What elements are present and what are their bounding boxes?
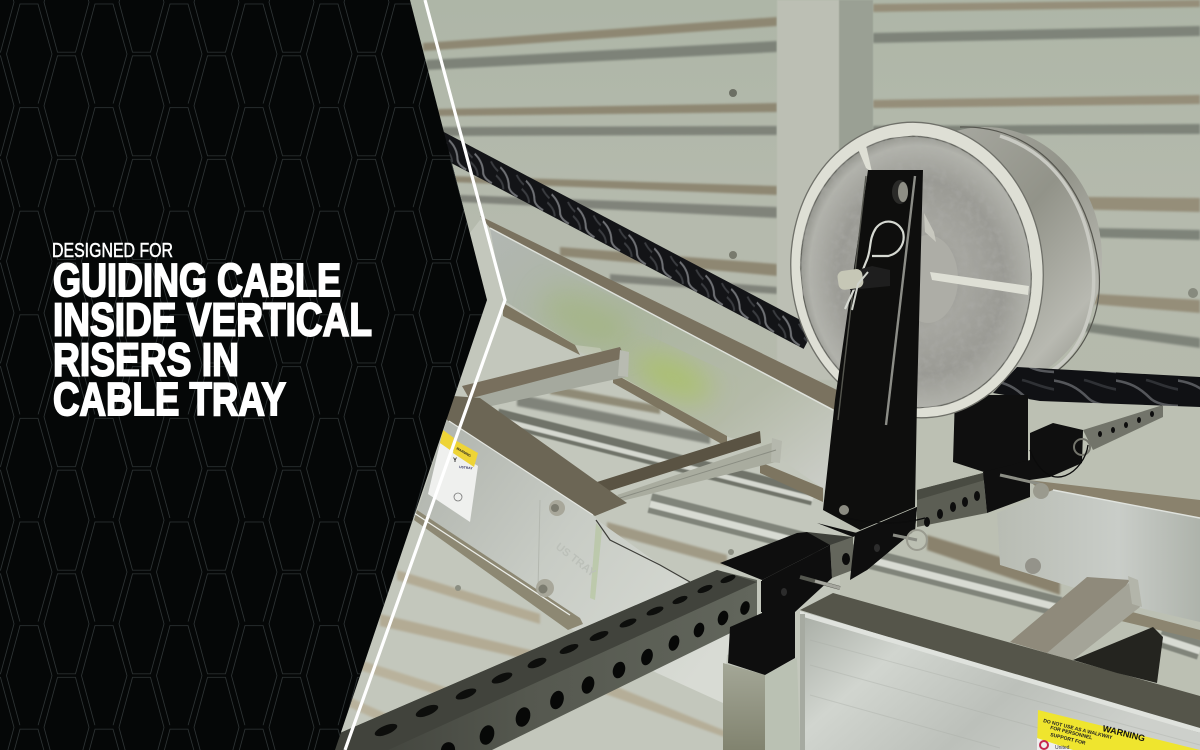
wheel spokes xyxy=(858,145,1029,295)
galvanized post sleeve xyxy=(723,658,800,750)
main title xyxy=(53,254,372,425)
photo: cable roller guide mounted on cable tray xyxy=(300,0,1200,750)
clevis pin and R-clip xyxy=(837,222,904,310)
front tray rail with warning label xyxy=(800,593,1200,750)
rear perforated tube xyxy=(917,405,1163,527)
rear bracket collars and pins xyxy=(983,423,1090,513)
tube side holes xyxy=(439,600,751,750)
back tray rail and rung xyxy=(997,480,1200,683)
rail compliance label: USTRAY xyxy=(459,465,474,470)
ladder rungs xyxy=(462,347,782,501)
rail compliance label xyxy=(428,430,478,522)
main title: INSIDE VERTICAL xyxy=(53,294,372,346)
main title: GUIDING CABLE xyxy=(53,254,341,306)
pulley wheel front flange xyxy=(776,110,1058,430)
warning label: DO NOT USE AS A WALKWAY xyxy=(1043,718,1113,741)
tube top holes xyxy=(373,573,737,739)
rear black riser bracket xyxy=(953,395,1028,473)
perforated square steel tube xyxy=(300,570,757,750)
warning label xyxy=(1037,710,1200,750)
white chevron outline xyxy=(345,0,505,750)
heading block xyxy=(52,239,372,425)
bolts on rail xyxy=(536,500,565,597)
black chevron panel with hexagon pattern xyxy=(0,0,487,750)
main title: CABLE TRAY xyxy=(53,373,286,425)
warning label: WARNING xyxy=(1102,723,1146,743)
twisted cable, right run xyxy=(993,367,1200,407)
rail compliance label: Y xyxy=(453,458,457,464)
tray stamp: US TRAY xyxy=(553,541,598,580)
wheel dish xyxy=(787,125,1045,419)
lower wall panels xyxy=(340,220,1200,750)
black upright bracket arm xyxy=(823,170,923,530)
lower-left tray rail with label xyxy=(414,395,760,703)
wheel hub xyxy=(898,235,958,323)
upper wall with stripes xyxy=(400,0,1200,450)
upper tray side rail xyxy=(480,216,837,502)
kicker: designed for: DESIGNED FOR xyxy=(52,239,173,262)
twisted cable, left run xyxy=(414,122,815,349)
warning label: SUPPORT FOR xyxy=(1050,732,1086,747)
main title: RISERS IN xyxy=(53,334,239,386)
spool wheel back flange xyxy=(868,127,1102,389)
wall pillar xyxy=(777,0,873,380)
conduit pipes behind tray xyxy=(497,417,1200,651)
warning label: FOR PERSONNEL xyxy=(1050,725,1093,741)
black tube collar and post xyxy=(720,532,840,675)
mid tube segment and base collar xyxy=(807,505,927,580)
rail compliance label: WARNING xyxy=(456,446,472,458)
